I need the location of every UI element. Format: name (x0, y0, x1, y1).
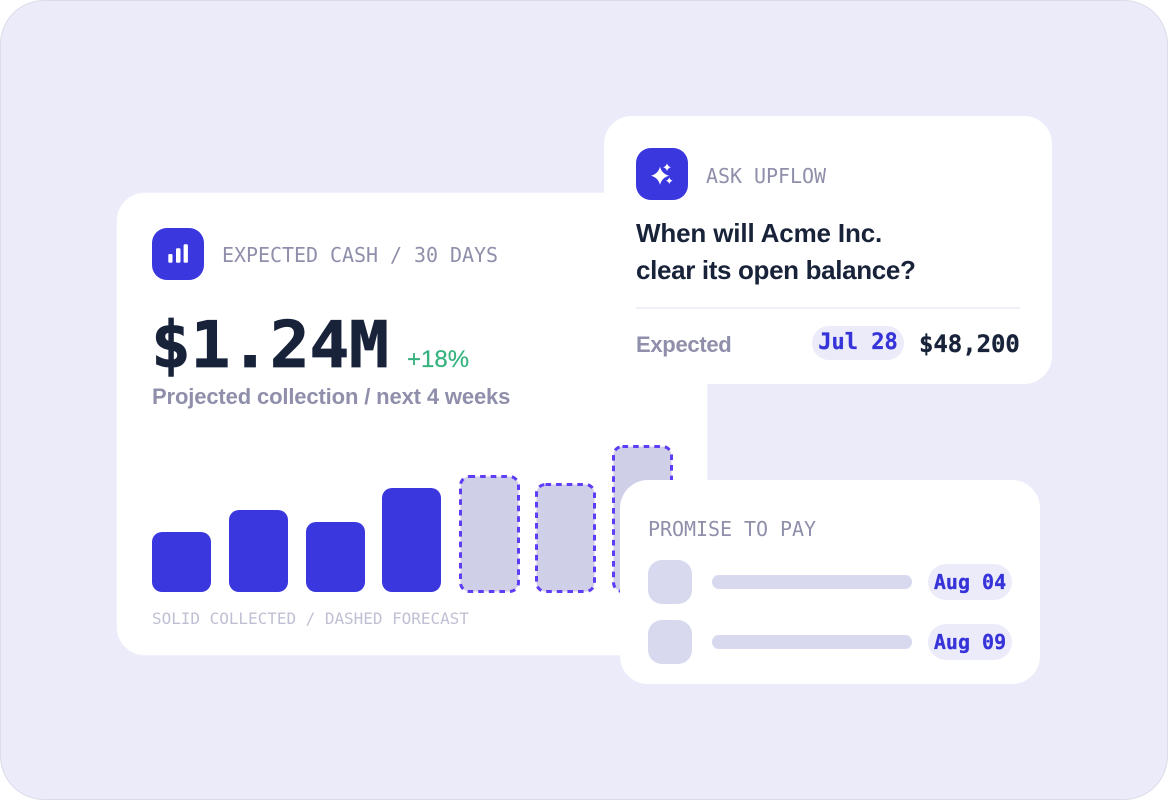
date pill: Jul 28 (818, 330, 898, 355)
card label: EXPECTED CASH / 30 DAYS (222, 243, 498, 267)
big number: $1.24M (151, 308, 389, 383)
date pill (928, 624, 1012, 660)
avatar placeholder (648, 560, 692, 604)
date pill (928, 564, 1012, 600)
date pill: Aug 09 (934, 630, 1006, 654)
date pill (812, 326, 904, 360)
row 2 (648, 620, 1012, 664)
amount: $48,200 (919, 330, 1020, 358)
expected label: Expected (636, 332, 731, 357)
bar chart (152, 445, 673, 593)
avatar placeholder (648, 620, 692, 664)
divider (636, 307, 1020, 309)
panel: expected cash (117, 193, 707, 655)
question: clear its open balance? (636, 255, 916, 285)
icon: bar chart (152, 228, 204, 280)
collected bars (152, 488, 441, 592)
subtitle: Projected collection / next 4 weeks (152, 384, 510, 409)
icon: sparkles (636, 148, 688, 200)
date pill: Aug 04 (934, 570, 1006, 594)
card label: ASK UPFLOW (706, 164, 826, 188)
panel: ask upflow (604, 116, 1052, 384)
chart legend: SOLID COLLECTED / DASHED FORECAST (152, 609, 469, 628)
card label: PROMISE TO PAY (648, 517, 816, 541)
question: When will Acme Inc. (636, 218, 882, 248)
growth figure: +18% (407, 346, 469, 373)
text placeholder (712, 635, 912, 649)
question (636, 218, 916, 285)
row 1 (648, 560, 1012, 604)
panel: promise to pay (620, 480, 1040, 684)
text placeholder (712, 575, 912, 589)
forecast bars (460, 446, 672, 592)
